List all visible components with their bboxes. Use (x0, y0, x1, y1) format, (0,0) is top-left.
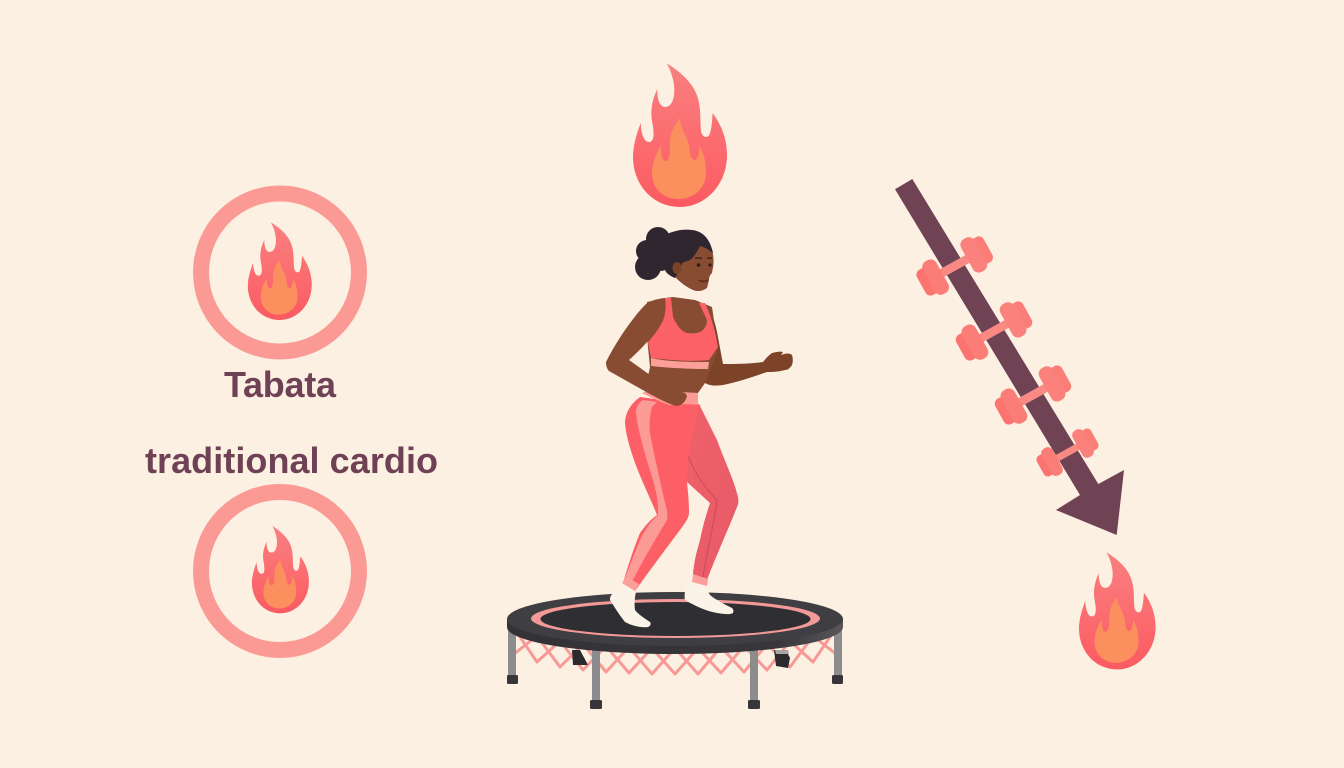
right arm (705, 307, 793, 386)
trampoline frame (507, 592, 843, 654)
dumbbell 2 (951, 296, 1037, 366)
dumbbell 1 (912, 231, 998, 301)
trampoline (507, 592, 843, 709)
icon: Tabata ring (201, 194, 359, 352)
hair and bun (635, 227, 713, 280)
legging stripe (623, 400, 667, 586)
torso (645, 277, 718, 393)
downward arrow (895, 179, 1124, 535)
icon: traditional cardio ring (201, 492, 359, 650)
label: traditional cardio: traditional cardio (145, 440, 438, 481)
icon: traditional cardio flame (252, 526, 309, 613)
icon: flame at the end of the arrow (1079, 552, 1156, 669)
trampoline clips (572, 650, 790, 668)
icon: large flame above the figure (633, 63, 727, 207)
back leg seam (681, 432, 717, 577)
dumbbell 3 (990, 360, 1076, 430)
eyes (695, 258, 712, 267)
front foot (610, 584, 651, 627)
dumbbell 4 (1033, 424, 1102, 481)
arrow with dumbbells (895, 179, 1124, 535)
back cuff (692, 574, 708, 586)
back foot (685, 582, 733, 614)
head (635, 227, 714, 291)
bra band (651, 358, 709, 369)
panel: Tabata (201, 194, 359, 405)
front leg (623, 397, 700, 591)
mouth (699, 280, 708, 282)
icon: Tabata flame (248, 222, 312, 320)
trampoline net (514, 628, 836, 674)
label: Tabata: Tabata (224, 364, 337, 405)
trampoline legs (507, 630, 843, 709)
waistband (642, 390, 698, 405)
back leg (678, 403, 738, 580)
panel: traditional cardio (145, 440, 438, 650)
figure: woman jumping (606, 227, 793, 627)
front cuff (622, 577, 639, 591)
ear (672, 262, 682, 274)
face (675, 240, 714, 291)
sports bra (648, 298, 718, 361)
left arm (606, 298, 687, 406)
